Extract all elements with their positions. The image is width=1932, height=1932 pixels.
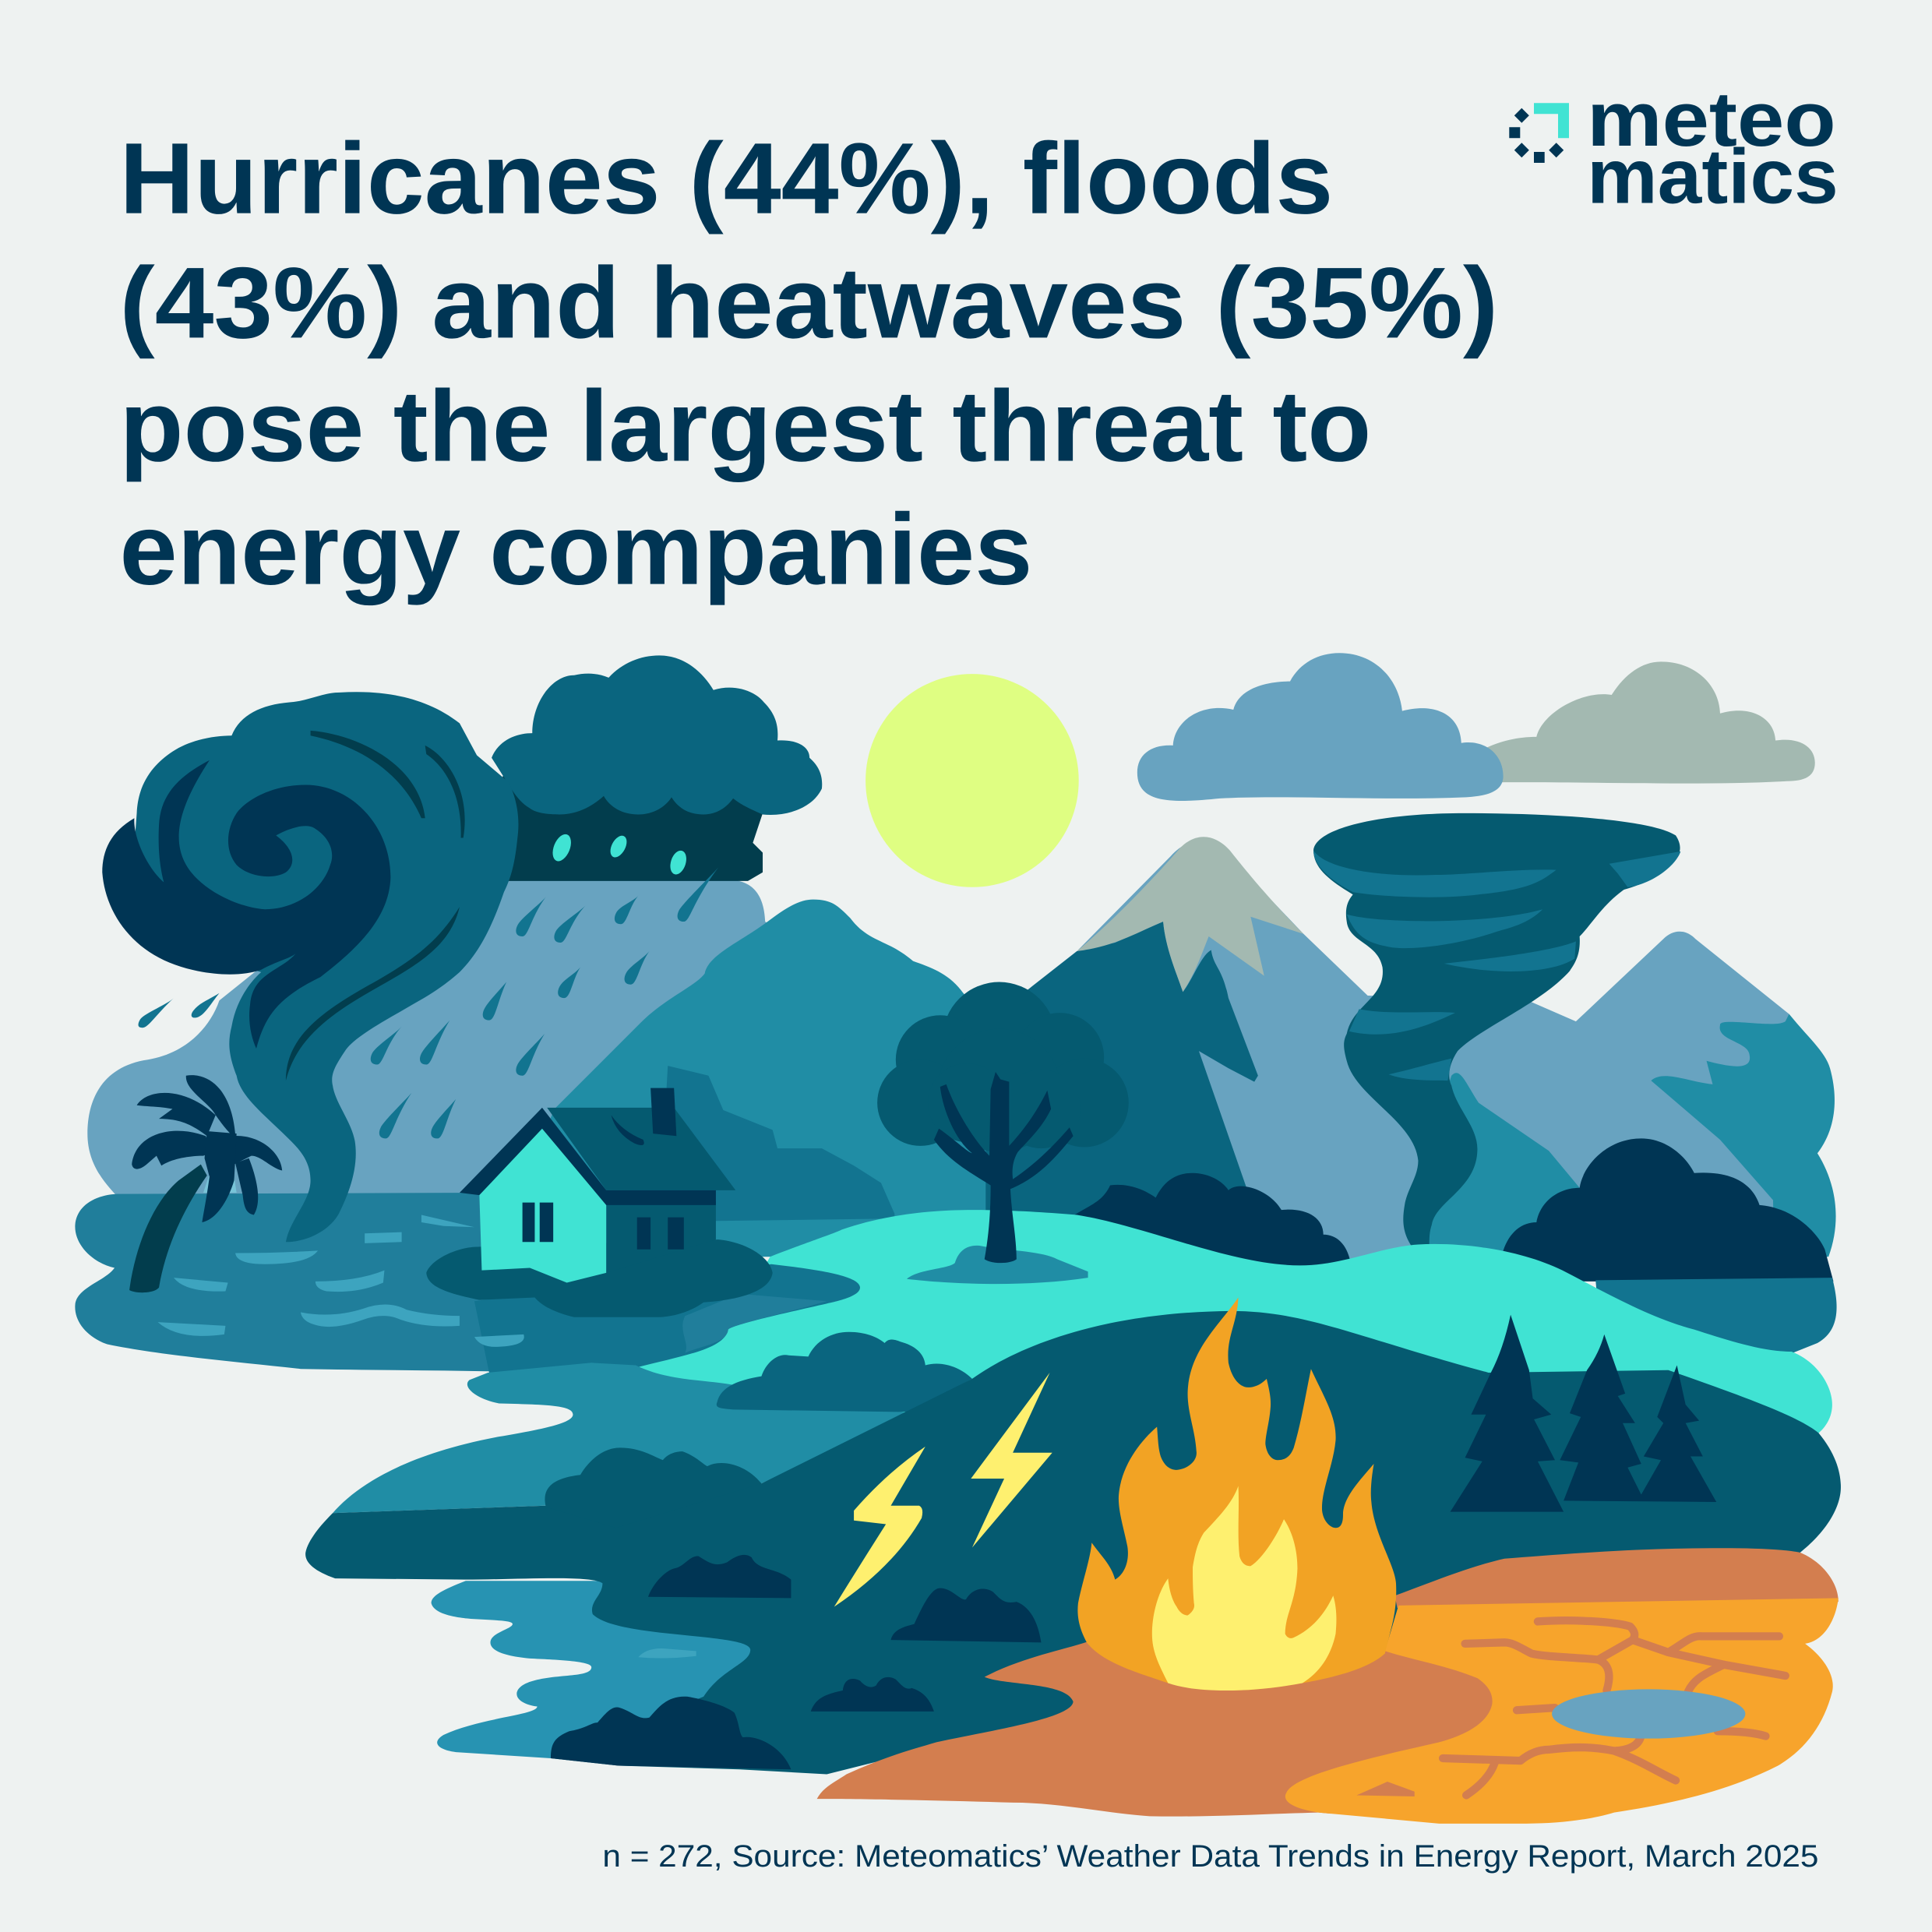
house chimney xyxy=(650,1088,676,1136)
tree trunk and branches xyxy=(934,1072,1074,1263)
tree xyxy=(877,982,1129,1284)
lower river xyxy=(432,1581,788,1762)
palm fronds xyxy=(132,1075,282,1222)
house windows xyxy=(523,1203,684,1250)
title: (43%) and heatwaves (35%) xyxy=(119,247,1498,359)
title: energy companies xyxy=(119,494,1032,606)
lightning bolts xyxy=(834,1373,1052,1606)
flame: inner xyxy=(1152,1486,1336,1690)
storm cloud xyxy=(492,655,822,815)
house side wall xyxy=(606,1201,716,1273)
sun xyxy=(866,674,1079,887)
source note: n = 272, Source: Meteomatics’ Weather Data Trends in Energy Report, March 2025 xyxy=(602,1839,1818,1874)
house roof outline xyxy=(460,1108,716,1205)
palm water glint xyxy=(203,1174,237,1193)
mountain shadow xyxy=(616,1066,894,1222)
ground: terracotta centre xyxy=(817,1641,1497,1817)
river glint xyxy=(638,1648,696,1659)
hill: cyan meadow xyxy=(636,1210,1832,1540)
small crack triangle xyxy=(1356,1782,1415,1796)
cloud: grey xyxy=(1479,661,1815,784)
band: right shore xyxy=(1595,1278,1837,1353)
storm cloud underside xyxy=(499,764,763,881)
pine trees xyxy=(1451,1315,1716,1512)
mountain: teal left xyxy=(493,900,1109,1257)
logo icon xyxy=(1509,103,1569,163)
palm trunk xyxy=(129,1165,207,1292)
house xyxy=(460,1088,735,1282)
house front wall xyxy=(479,1129,606,1282)
teal river xyxy=(333,1363,909,1513)
rain drops xyxy=(139,867,718,1138)
palm tree xyxy=(129,1075,282,1292)
flame: outer xyxy=(1077,1297,1396,1690)
tornado xyxy=(1313,813,1680,1247)
bush over river xyxy=(717,1332,972,1412)
rain backdrop xyxy=(87,880,788,1197)
mountain snow cap xyxy=(1077,837,1303,992)
ground: terracotta top xyxy=(1394,1548,1839,1608)
ripples xyxy=(157,1215,524,1347)
hurricane spiral xyxy=(102,760,390,1049)
water behind house xyxy=(474,1264,860,1373)
tornado bands xyxy=(1313,850,1680,1081)
title: pose the largest threat to xyxy=(119,371,1371,483)
logo wordmark xyxy=(1587,76,1839,220)
house roof xyxy=(547,1108,735,1190)
main hill xyxy=(305,1311,1841,1775)
puddle xyxy=(1552,1689,1745,1739)
cloud: blue xyxy=(1137,653,1504,801)
tree mound xyxy=(907,1246,1088,1284)
title xyxy=(119,123,1498,606)
tree crown xyxy=(877,982,1129,1152)
ground: cracked earth xyxy=(1285,1598,1839,1824)
logo wordmark: matics xyxy=(1587,134,1839,220)
bush: dark centre xyxy=(1074,1173,1350,1282)
ground cracks xyxy=(1443,1620,1786,1795)
dark bushes on hill xyxy=(551,1555,1041,1769)
mountain: teal right xyxy=(1651,1014,1836,1257)
mountain: blue range xyxy=(1031,841,1814,1269)
hurricane xyxy=(102,692,518,1242)
fire xyxy=(1077,1297,1396,1690)
bush on hill xyxy=(545,1447,761,1528)
water highlight patch xyxy=(682,1294,827,1353)
illustration: extreme weather landscape xyxy=(75,653,1841,1824)
flood water xyxy=(75,1193,860,1373)
hurricane streaks xyxy=(286,731,465,1081)
house island xyxy=(426,1239,773,1317)
mountain: teal behind tornado xyxy=(1417,1073,1580,1269)
mountain: dark face xyxy=(985,922,1258,1232)
house roof crack xyxy=(611,1115,644,1145)
logo wordmark: meteo xyxy=(1587,76,1836,163)
title: Hurricanes (44%), floods xyxy=(119,123,1333,235)
bush: dark right xyxy=(1504,1138,1833,1282)
rain drops: cyan xyxy=(549,831,689,876)
logo: meteomatics xyxy=(1509,76,1839,220)
